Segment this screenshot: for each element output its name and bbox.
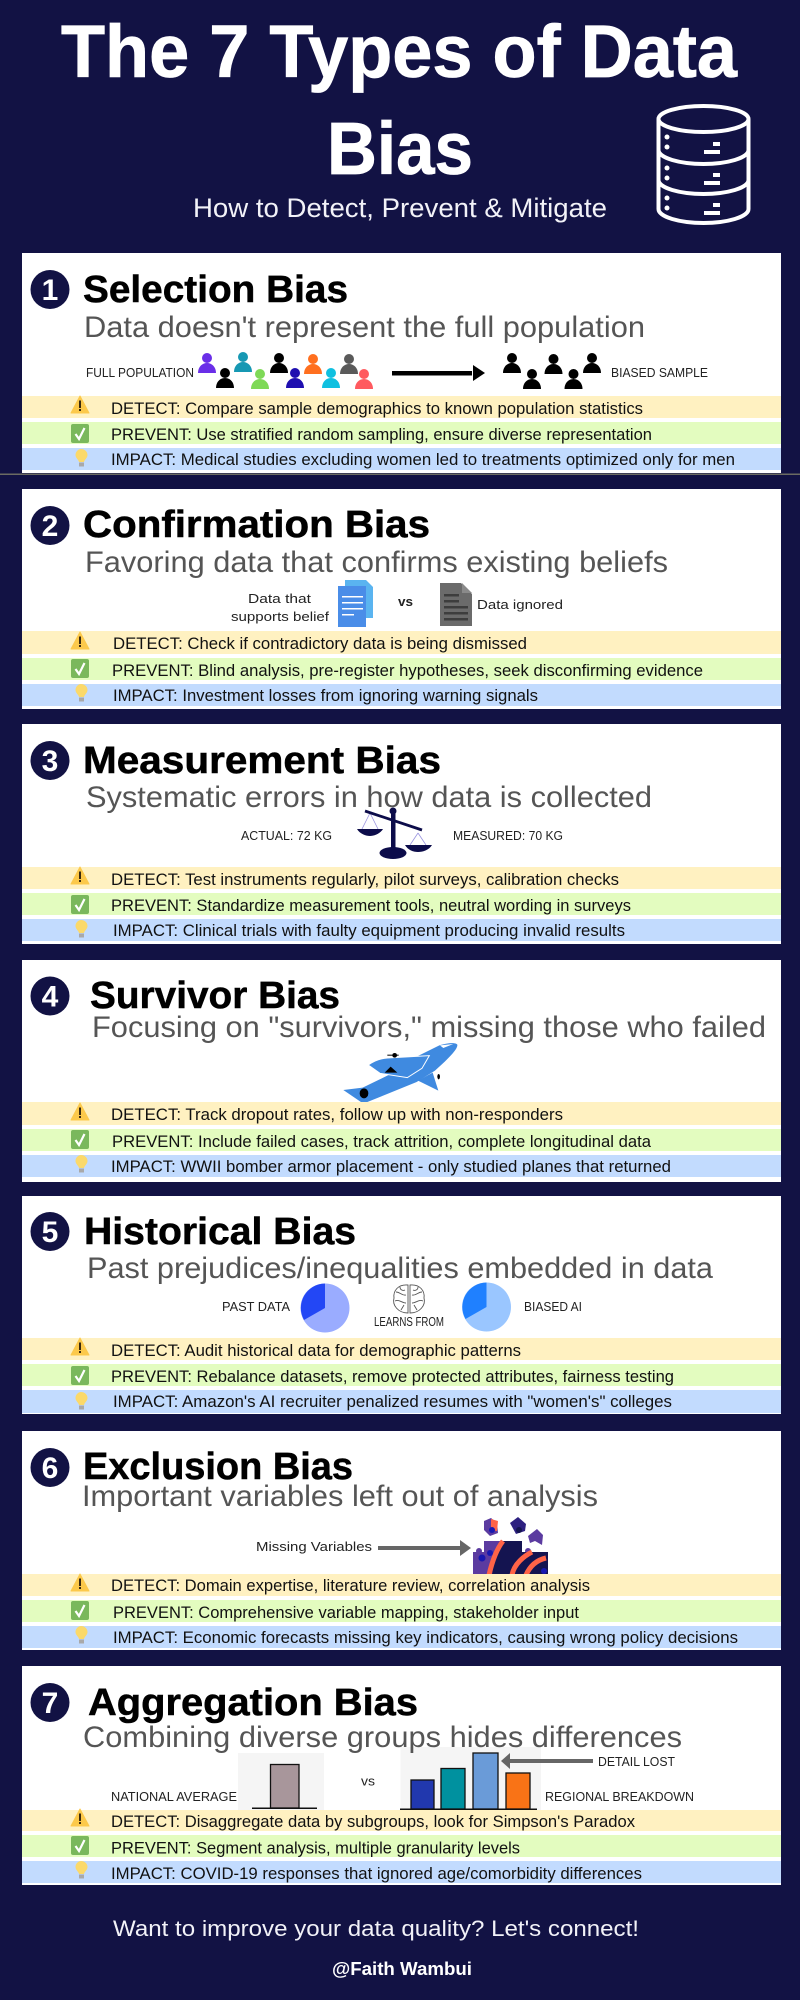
label: data ignored: Data ignored — [477, 597, 563, 612]
label: detail lost: DETAIL LOST — [598, 1754, 675, 1769]
impact row: IMPACT: WWII bomber armor placement - only studied planes that returned — [111, 1157, 671, 1176]
label: biased sample: BIASED SAMPLE — [611, 365, 708, 380]
heading: Historical Bias — [84, 1211, 356, 1253]
impact row — [22, 1390, 781, 1413]
prevent row: PREVENT: Comprehensive variable mapping, stakeholder input — [113, 1603, 579, 1622]
footer call to action: Want to improve your data quality? Let's connect! — [113, 1916, 639, 1941]
heading: Exclusion Bias — [83, 1446, 353, 1488]
footer author: @Faith Wambui — [332, 1959, 472, 1979]
number 5: 5 — [42, 1216, 58, 1249]
panel: measurement bias — [22, 724, 781, 944]
prevent row — [22, 1600, 781, 1622]
heading: Survivor Bias — [90, 975, 340, 1017]
number 1 — [30, 270, 70, 309]
impact row: IMPACT: Investment losses from ignoring warning signals — [113, 686, 538, 705]
description: Past prejudices/inequalities embedded in data — [87, 1252, 714, 1285]
detect row — [22, 1102, 781, 1125]
description: Important variables left out of analysis — [82, 1480, 598, 1513]
label: actual: ACTUAL: 72 KG — [241, 828, 332, 843]
title — [61, 10, 738, 190]
description: Focusing on "survivors," missing those who failed — [92, 1011, 766, 1044]
impact row — [22, 684, 781, 706]
description: Favoring data that confirms existing beliefs — [85, 546, 668, 579]
bar chart: regional breakdown — [400, 1747, 541, 1811]
impact row — [22, 1155, 781, 1177]
arrow — [378, 1540, 471, 1556]
prevent row: PREVENT: Rebalance datasets, remove protected attributes, fairness testing — [111, 1367, 674, 1386]
prevent row: PREVENT: Segment analysis, multiple granularity levels — [111, 1838, 520, 1858]
detect row — [22, 867, 781, 889]
arrow — [501, 1753, 593, 1769]
icon: grey document — [440, 583, 472, 626]
detect row — [22, 1338, 781, 1360]
panel: survivor bias — [22, 960, 781, 1182]
label: biased ai: BIASED AI — [524, 1299, 582, 1314]
number 6: 6 — [42, 1452, 58, 1485]
impact row: IMPACT: Economic forecasts missing key indicators, causing wrong policy decisions — [113, 1628, 738, 1647]
number 6 — [30, 1448, 70, 1487]
detect row: DETECT: Audit historical data for demographic patterns — [111, 1341, 521, 1360]
icon: database — [658, 106, 748, 223]
label: full population: FULL POPULATION — [86, 365, 194, 380]
number 5 — [30, 1212, 70, 1251]
label: learns from: LEARNS FROM — [374, 1314, 444, 1329]
prevent row — [22, 1364, 781, 1386]
icon: tilted scale — [357, 808, 432, 859]
panel: exclusion bias — [22, 1431, 781, 1650]
impact row — [22, 1861, 781, 1883]
arrow — [392, 365, 485, 381]
panel: aggregation bias — [22, 1666, 781, 1885]
detect row — [22, 1574, 781, 1596]
prevent row: PREVENT: Use stratified random sampling, ensure diverse representation — [111, 425, 652, 444]
label: data that supports belief: supports belief — [231, 609, 329, 624]
number 7 — [30, 1683, 70, 1722]
panel: confirmation bias — [22, 489, 781, 709]
icon: damaged plane — [343, 1043, 457, 1104]
detect row: DETECT: Test instruments regularly, pilot surveys, calibration checks — [111, 870, 619, 889]
panel: historical bias — [22, 1196, 781, 1414]
description: Combining diverse groups hides differences — [83, 1721, 682, 1754]
number 3: 3 — [42, 745, 58, 778]
prevent row — [22, 893, 781, 915]
prevent row — [22, 1129, 781, 1151]
heading: Aggregation Bias — [88, 1682, 418, 1724]
prevent row: PREVENT: Include failed cases, track attrition, complete longitudinal data — [112, 1132, 652, 1151]
label: measured: MEASURED: 70 KG — [453, 828, 563, 843]
title: The 7 Types of Data — [61, 10, 738, 93]
label: national average: NATIONAL AVERAGE — [111, 1789, 237, 1804]
heading: Confirmation Bias — [83, 504, 430, 546]
number 4: 4 — [42, 980, 59, 1014]
label: past data: PAST DATA — [222, 1299, 290, 1314]
detect row — [22, 631, 781, 654]
prevent row: PREVENT: Standardize measurement tools, neutral wording in surveys — [111, 896, 631, 915]
number 2: 2 — [42, 510, 58, 543]
pie: past data — [300, 1284, 350, 1332]
icon: puzzle with missing pieces — [473, 1517, 548, 1575]
impact row: IMPACT: Medical studies excluding women led to treatments optimized only for men — [111, 450, 735, 469]
icon: diverse population — [198, 352, 373, 389]
number 3 — [30, 741, 70, 780]
icon: brain — [394, 1285, 424, 1313]
number 2 — [30, 506, 70, 545]
detect row — [22, 396, 781, 418]
label: regional breakdown: REGIONAL BREAKDOWN — [545, 1789, 694, 1804]
detect row: DETECT: Domain expertise, literature review, correlation analysis — [111, 1576, 590, 1595]
number 4 — [30, 976, 70, 1016]
prevent row: PREVENT: Blind analysis, pre-register hypotheses, seek disconfirming evidence — [112, 661, 703, 680]
label: vs: vs — [361, 1774, 376, 1788]
description: Data doesn't represent the full population — [84, 311, 645, 344]
prevent row — [22, 422, 781, 444]
number 7: 7 — [42, 1687, 58, 1720]
impact row — [22, 919, 781, 941]
detect row: DETECT: Check if contradictory data is being dismissed — [113, 634, 527, 653]
impact row: IMPACT: Clinical trials with faulty equipment producing invalid results — [113, 921, 625, 940]
label: vs: vs — [398, 594, 413, 609]
heading: Measurement Bias — [83, 740, 441, 782]
heading: Selection Bias — [83, 269, 348, 311]
prevent row — [22, 658, 781, 680]
impact row: IMPACT: COVID-19 responses that ignored age/comorbidity differences — [111, 1864, 642, 1883]
panel: selection bias — [22, 253, 781, 473]
prevent row — [22, 1835, 781, 1858]
number 1: 1 — [42, 274, 58, 307]
impact row: IMPACT: Amazon's AI recruiter penalized resumes with "women's" colleges — [113, 1392, 672, 1411]
icon: biased sample — [503, 353, 601, 389]
detect row: DETECT: Compare sample demographics to known population statistics — [111, 399, 643, 418]
label: data that supports belief — [231, 591, 329, 624]
label: data that supports belief: Data that — [248, 591, 311, 606]
pie: biased ai — [462, 1282, 511, 1332]
subtitle: How to Detect, Prevent & Mitigate — [193, 193, 607, 223]
bar chart: national average — [238, 1753, 324, 1811]
icon: blue document — [338, 580, 373, 627]
detect row: DETECT: Disaggregate data by subgroups, look for Simpson's Paradox — [111, 1812, 635, 1831]
label: missing variables: Missing Variables — [256, 1539, 373, 1554]
detect row — [22, 1809, 781, 1831]
detect row: DETECT: Track dropout rates, follow up with non-responders — [111, 1105, 563, 1124]
title: Bias — [327, 107, 473, 190]
description: Systematic errors in how data is collected — [86, 781, 652, 814]
